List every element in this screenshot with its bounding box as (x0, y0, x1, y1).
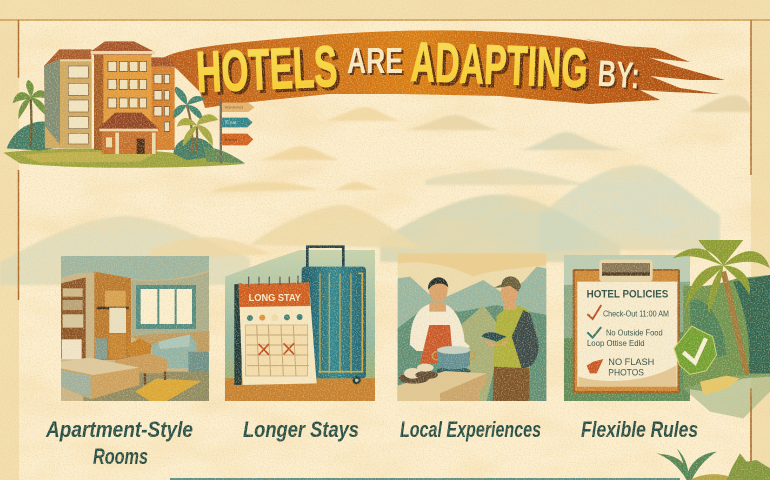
title text: HOTELS (198, 37, 342, 108)
palm tree and foliage (673, 240, 770, 418)
clipboard: HOTEL POLICIES (587, 289, 668, 301)
panel: flexible rules (564, 255, 690, 401)
left wing (44, 50, 92, 148)
bed (61, 358, 139, 399)
signpost: Bazaar (225, 137, 238, 142)
caption: rooms: Rooms (93, 444, 148, 469)
hotel illustration (3, 41, 255, 168)
portico (102, 130, 157, 154)
trunk (723, 272, 747, 374)
clipboard: Loop Ottise Edld (587, 338, 645, 348)
pot (432, 346, 474, 375)
title text: ADAPTING (410, 30, 589, 99)
rug (135, 378, 202, 401)
brush stroke (163, 30, 725, 108)
traveller (482, 276, 539, 401)
panel: local experiences (398, 253, 546, 401)
window (136, 285, 196, 329)
counter (398, 371, 487, 401)
bottom right palm fronds (657, 388, 770, 480)
calendar (234, 276, 317, 385)
misty mountains and clouds (0, 95, 751, 285)
panel: apartment-style rooms (61, 256, 209, 401)
centre tower (94, 53, 151, 150)
signpost: Wanderlust (225, 106, 243, 110)
cabinet (94, 272, 131, 360)
bottom teal strip (170, 478, 680, 480)
check badge (674, 326, 717, 374)
right wing (151, 67, 175, 150)
caption: longer stays: Longer Stays (243, 417, 359, 442)
title text: ARE (349, 42, 405, 83)
title banner (163, 30, 725, 108)
bookshelf (61, 277, 86, 358)
calendar: LONG STAY (249, 293, 301, 304)
sofa (130, 331, 209, 355)
title text: ADAPTING (412, 33, 592, 103)
clipboard: No Outside Food (606, 328, 663, 338)
bushes (7, 121, 65, 151)
ground (3, 149, 245, 168)
suitcase (302, 247, 366, 384)
signpost (220, 99, 255, 163)
caption: flexible rules: Flexible Rules (581, 417, 698, 442)
title text: BY: (598, 55, 643, 99)
clipboard: NO FLASH (608, 357, 654, 367)
left palm (13, 80, 49, 146)
clipboard (573, 260, 680, 393)
right palms (173, 87, 245, 163)
title text: ARE (347, 40, 403, 81)
title text (195, 30, 643, 108)
signpost: 贝 eat (225, 120, 237, 126)
clipboard: PHOTOS (608, 368, 644, 378)
chair (127, 338, 152, 357)
title text: BY: (596, 53, 641, 97)
title text: HOTELS (195, 34, 339, 105)
foliage mass (683, 275, 770, 392)
caption: local experiences: Local Experiences (400, 417, 541, 442)
panel: longer stays (225, 247, 375, 401)
caption: apartment-style rooms: Apartment-Style (45, 417, 193, 442)
clipboard: Check-Out 11:00 AM (603, 308, 669, 318)
plates (399, 373, 429, 384)
chef (410, 277, 470, 363)
fronds (673, 240, 770, 313)
